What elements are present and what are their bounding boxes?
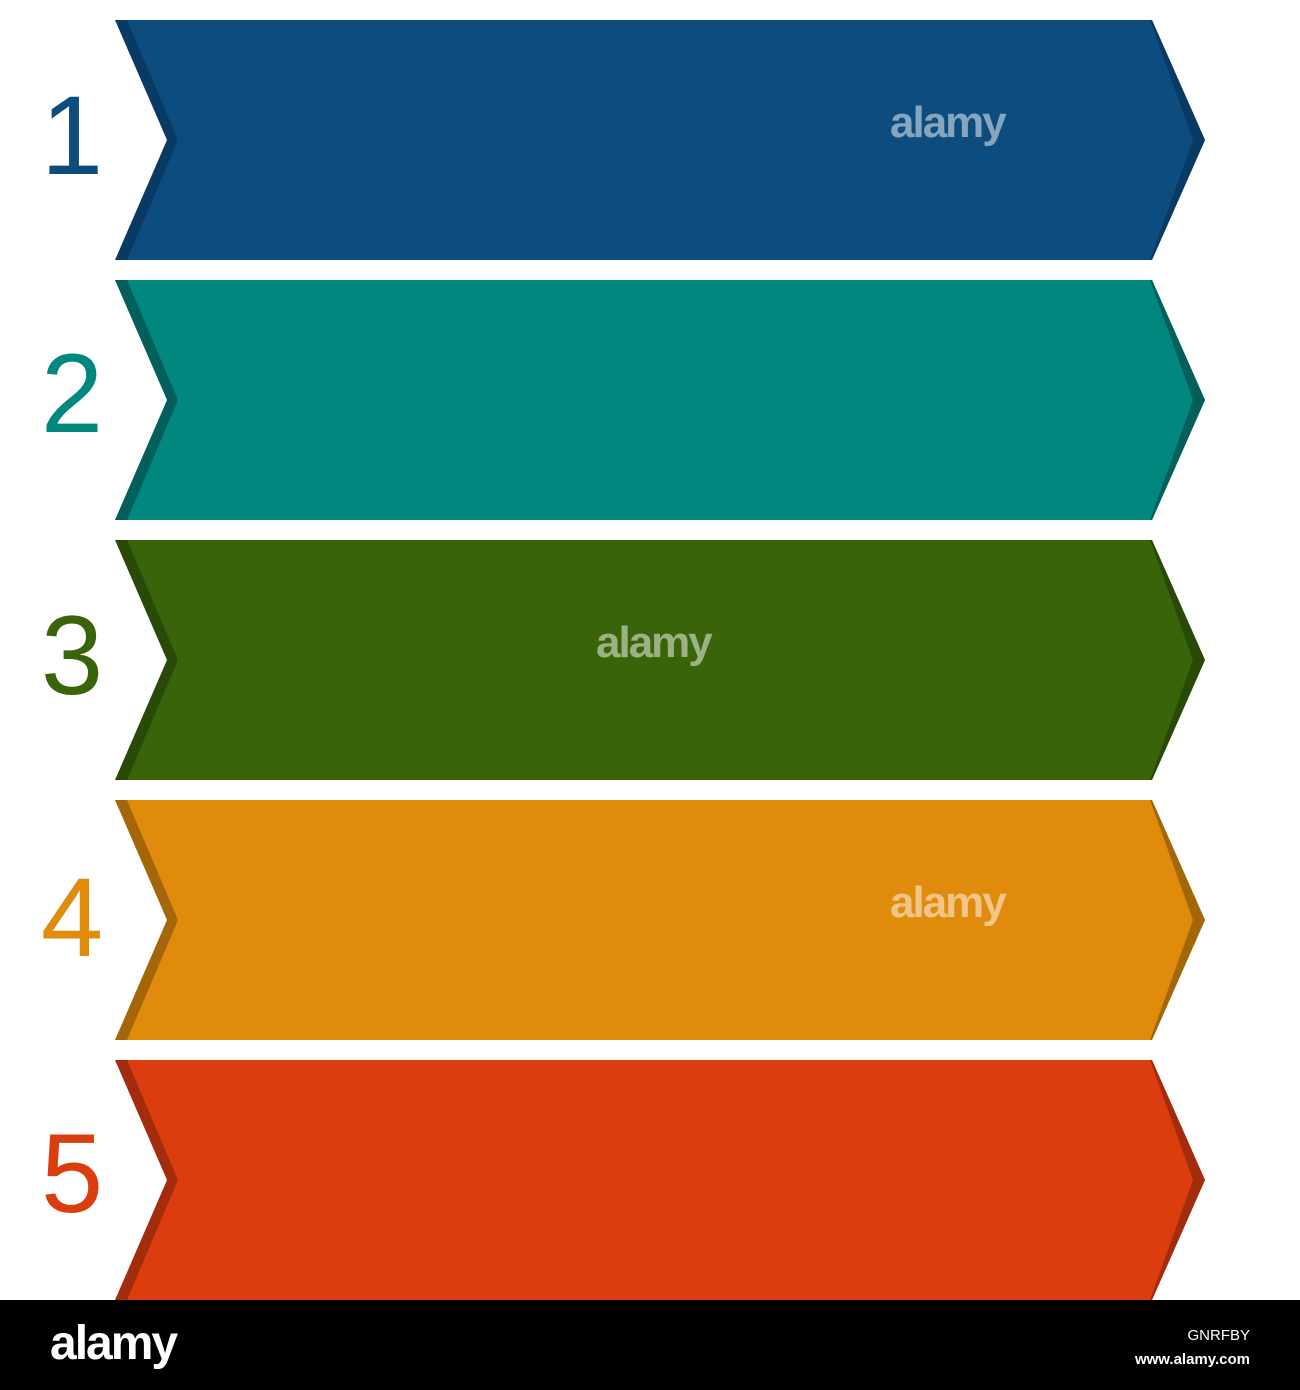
chevron 4 (115, 800, 1205, 1040)
footer id: www.alamy.com (1135, 1351, 1250, 1368)
footer id: GNRFBY (1187, 1327, 1250, 1344)
footer bar (0, 1300, 1300, 1390)
chevron 1 (115, 20, 1205, 260)
chevron 2 (115, 280, 1205, 520)
number 4: 4 (41, 855, 103, 980)
number 3: 3 (41, 593, 103, 718)
footer logo: alamy (50, 1317, 176, 1370)
watermark 3: alamy (596, 618, 711, 667)
number 1: 1 (41, 73, 103, 198)
footer id (1135, 1327, 1250, 1368)
chevron 5 (115, 1060, 1205, 1300)
chevron 3 (115, 540, 1205, 780)
watermark 1: alamy (890, 98, 1005, 147)
watermark 4: alamy (890, 878, 1005, 927)
number 2: 2 (41, 331, 103, 456)
number 5: 5 (41, 1111, 103, 1236)
